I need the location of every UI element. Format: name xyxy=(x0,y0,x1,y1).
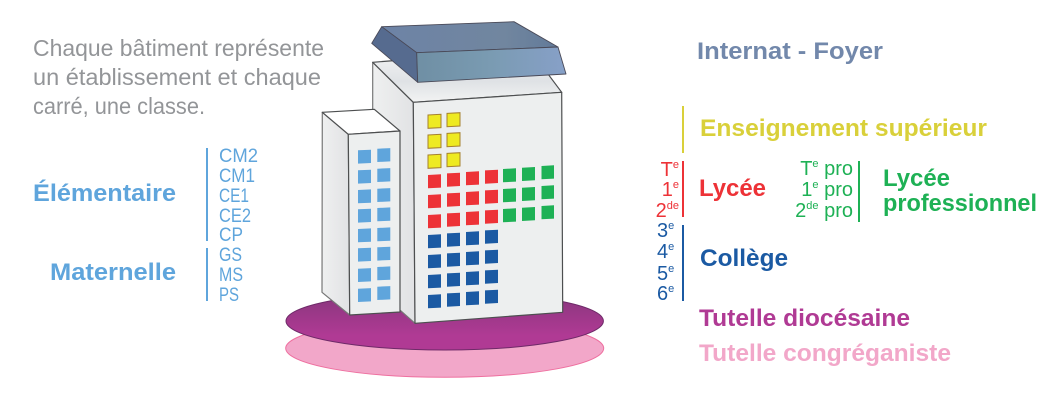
elementary and nursery class labels: CM2 xyxy=(219,146,258,167)
elementary and nursery class labels: PS xyxy=(219,285,239,306)
bracket: middle school xyxy=(682,225,684,301)
intro text: carré, une classe. xyxy=(33,93,205,119)
high school levels: 1 xyxy=(662,179,673,201)
middle school levels: e xyxy=(668,220,674,232)
middle school levels: 6 xyxy=(657,283,668,305)
heading: Élémentaire: Élémentaire xyxy=(33,179,176,207)
small building xyxy=(322,109,400,315)
high school levels: 2 xyxy=(656,200,667,222)
label: boarding school: Internat - Foyer xyxy=(697,38,883,65)
intro text: Chaque bâtiment représente xyxy=(33,35,324,61)
middle school levels xyxy=(657,220,674,305)
high school levels: e xyxy=(673,179,679,191)
middle school levels: e xyxy=(668,241,674,253)
vocational school levels: 1 xyxy=(801,179,812,201)
small building front xyxy=(348,131,400,315)
middle school group xyxy=(657,220,788,305)
vocational school levels: pro xyxy=(819,200,853,222)
high school classes: red squares xyxy=(428,170,498,228)
label: middle school: Collège xyxy=(700,245,788,272)
bracket: vocational school xyxy=(858,161,860,222)
heading: Maternelle: Maternelle xyxy=(50,259,176,286)
bracket: elementary xyxy=(206,148,208,241)
vocational school classes: green squares xyxy=(503,165,554,222)
vocational school levels: pro xyxy=(819,158,853,180)
main building xyxy=(373,50,563,323)
vocational school levels: e xyxy=(812,179,819,191)
main building top xyxy=(373,50,562,102)
main building front xyxy=(413,92,563,323)
elementary and nursery class labels: CE2 xyxy=(219,206,251,227)
elementary and nursery class labels: CM1 xyxy=(219,166,255,187)
elementary and nursery class labels: GS xyxy=(219,245,242,266)
small building classes: blue squares xyxy=(358,148,390,302)
vocational school levels xyxy=(795,158,853,222)
small building side xyxy=(322,112,350,315)
middle school levels: 5 xyxy=(657,263,668,285)
middle school levels: 3 xyxy=(657,220,668,242)
vocational school levels: 2 xyxy=(795,200,806,222)
roof top face xyxy=(382,22,558,53)
base: diocesan oversight ellipse xyxy=(286,292,603,350)
base: congregational oversight ellipse xyxy=(286,319,604,377)
roof xyxy=(372,22,566,82)
elementary and nursery class labels: CE1 xyxy=(219,186,249,207)
elementary and nursery class labels: MS xyxy=(219,265,243,286)
label: congregational oversight: Tutelle congréganiste xyxy=(699,340,951,367)
vocational school levels: de xyxy=(806,200,819,212)
roof front face xyxy=(417,47,566,82)
roof left face xyxy=(372,27,418,82)
bracket: nursery xyxy=(206,248,208,301)
high school group xyxy=(656,159,766,222)
label: high school: Lycée xyxy=(699,175,766,202)
high school levels: de xyxy=(667,200,679,212)
middle school classes: blue squares xyxy=(428,230,498,308)
middle school levels: e xyxy=(668,263,674,275)
elementary and nursery class labels: CP xyxy=(219,225,243,246)
bracket: high school xyxy=(682,161,684,217)
high school levels xyxy=(656,159,679,222)
vocational school group xyxy=(795,158,1037,222)
middle school levels: 4 xyxy=(657,241,668,263)
main building side xyxy=(373,62,415,323)
bracket: higher education xyxy=(682,106,684,153)
label: vocational school: Lycée xyxy=(883,165,950,192)
label: vocational school: professionnel xyxy=(883,190,1037,217)
higher education classes: yellow squares xyxy=(428,113,460,168)
small building top xyxy=(322,109,400,134)
high school levels: e xyxy=(673,159,679,171)
middle school levels: e xyxy=(668,283,674,295)
intro text: un établissement et chaque xyxy=(33,64,321,90)
vocational school levels: T xyxy=(800,158,812,180)
vocational school levels: pro xyxy=(819,179,853,201)
label: vocational school xyxy=(883,165,1037,217)
vocational school levels: e xyxy=(812,158,819,170)
label: diocesan oversight: Tutelle diocésaine xyxy=(699,305,910,332)
intro text xyxy=(33,35,324,119)
elementary and nursery legend xyxy=(33,146,258,306)
label: higher education: Enseignement supérieur xyxy=(700,115,987,142)
high school levels: T xyxy=(661,159,673,181)
elementary and nursery class labels xyxy=(219,146,258,306)
